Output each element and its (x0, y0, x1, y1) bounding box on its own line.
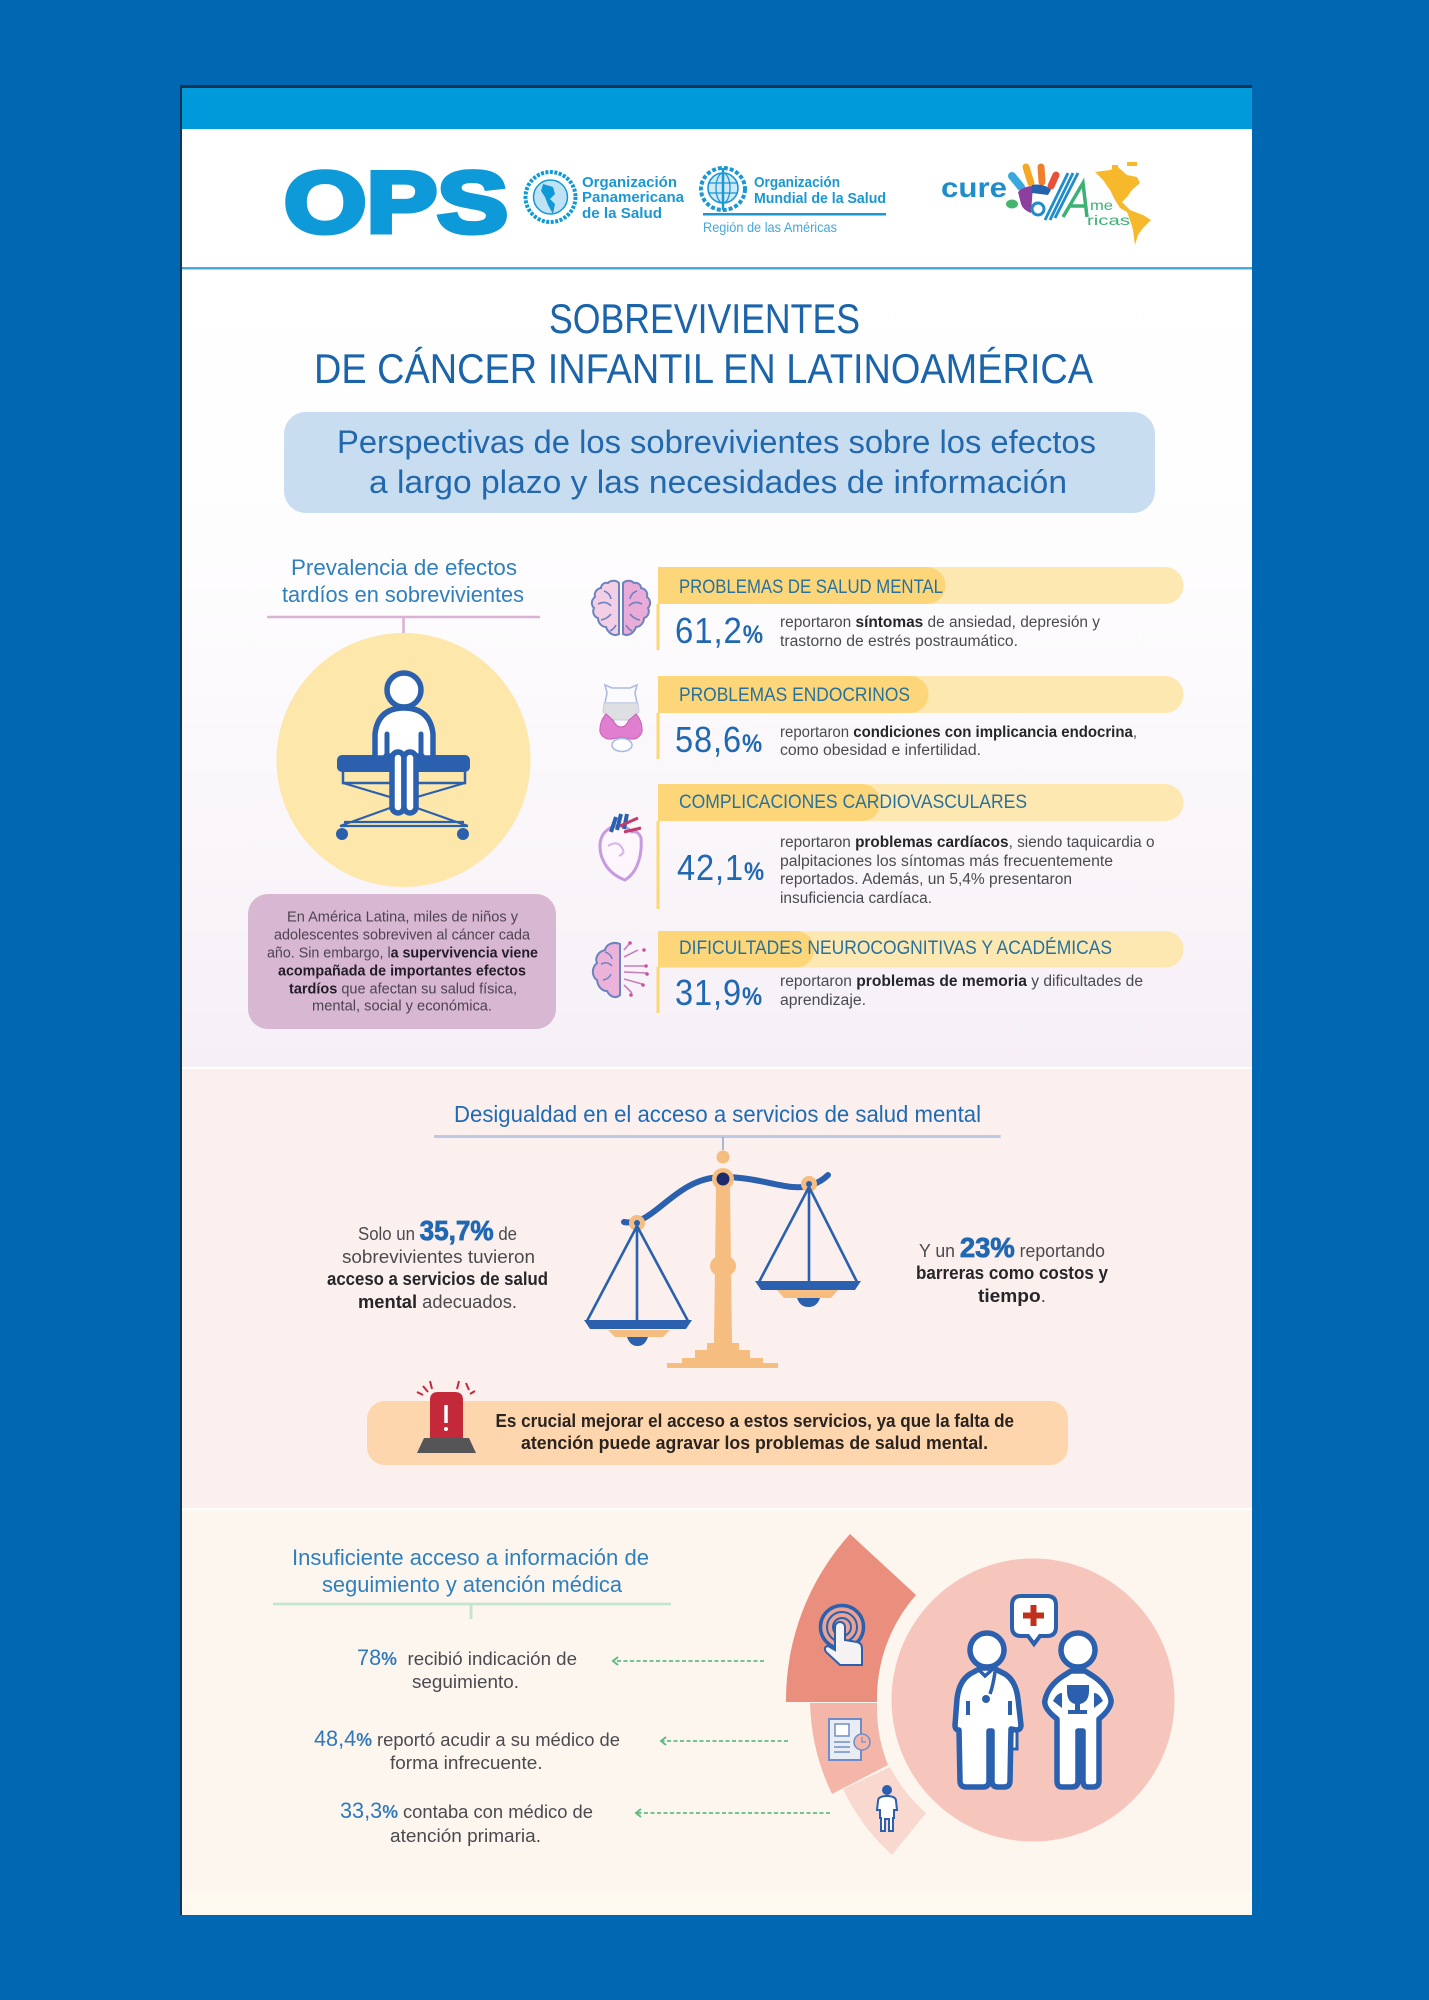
stat 48,4%: 48,4% (314, 1726, 372, 1751)
stat text: 35,7%: acceso a servicios de salud (327, 1269, 548, 1289)
callout: context text: acompañada de importantes efectos (278, 964, 526, 980)
logo: WHO emblem and name: Organización (754, 174, 840, 191)
description (780, 834, 1154, 907)
icon: alarm siren (417, 1381, 476, 1453)
stat text: 23% (916, 1232, 1108, 1306)
row: cardiovascular (600, 784, 1184, 909)
category bar: DIFICULTADES NEUROCOGNITIVAS Y ACADÉMICAS (679, 938, 1112, 959)
icon: document with clock (829, 1719, 870, 1760)
heading: prevalence (267, 555, 540, 634)
panel: insufficient follow-up information (273, 1534, 1174, 1855)
icon: unbalanced scale (584, 1150, 861, 1368)
panel: inequality in mental health access (327, 1101, 1108, 1465)
description: como obesidad e infertilidad. (780, 742, 981, 759)
radial chart: follow-up sectors (786, 1534, 926, 1855)
heading: follow-up: Insuficiente acceso a información de (292, 1545, 649, 1570)
subtitle banner: Perspectivas de los sobrevivientes sobre los efectos (337, 424, 1096, 460)
row: neurocognitive (593, 931, 1184, 1013)
stat text: 35,7%: sobrevivientes tuvieron (342, 1247, 535, 1267)
stat 58,6%: 58,6% (675, 719, 763, 760)
callout: context text (248, 894, 556, 1029)
icon: map of the Americas (1095, 162, 1151, 245)
stat 48,4% (314, 1726, 620, 1773)
row: endocrine (600, 676, 1184, 760)
subtitle banner: a largo plazo y las necesidades de información (369, 464, 1067, 500)
icon: speech bubble with cross (1012, 1596, 1056, 1644)
callout: improve access (367, 1401, 1068, 1465)
logo: OPS: OPS (284, 155, 508, 251)
category bar (656, 931, 1184, 1013)
callout: improve access: Es crucial mejorar el acceso a estos servicios, ya que la falta de (496, 1411, 1014, 1431)
icon: patient (1045, 1633, 1111, 1787)
description (780, 614, 1100, 650)
category bar: PROBLEMAS DE SALUD MENTAL (679, 577, 943, 598)
icon: child on examination table (276, 633, 530, 887)
description: reportaron problemas cardíacos, siendo taquicardia o (780, 834, 1154, 851)
stat 78% (357, 1645, 577, 1692)
title (314, 295, 1093, 392)
subtitle banner (284, 412, 1155, 513)
description: reportaron síntomas de ansiedad, depresión y (780, 614, 1100, 631)
icon: thyroid (600, 685, 642, 752)
icon: doctor (955, 1633, 1021, 1787)
description: palpitaciones los síntomas más frecuentemente (780, 853, 1113, 870)
row: mental health (592, 567, 1184, 651)
poster sheet (180, 85, 1252, 1915)
logo: PAHO emblem and name: Panamericana (582, 189, 685, 206)
stat 33,3%: 33,3% (340, 1798, 398, 1823)
category bar: PROBLEMAS ENDOCRINOS (679, 685, 910, 706)
description: trastorno de estrés postraumático. (780, 633, 1018, 650)
category bar (656, 784, 1184, 909)
logo: Cure All Américas (941, 162, 1151, 245)
description (780, 973, 1143, 1009)
icon: brain with neural connections (593, 941, 649, 997)
stat 78%: seguimiento. (412, 1672, 519, 1692)
description: reportados. Además, un 5,4% presentaron (780, 871, 1072, 888)
logo: Cure All Américas: ricas (1087, 212, 1130, 228)
arrow 1 (613, 1657, 764, 1665)
callout: context text: tardíos que afectan su salud física, (289, 981, 517, 997)
panel: prevalence of late effects (248, 555, 556, 1029)
logo: WHO emblem and name (701, 168, 886, 235)
heading: prevalence: tardíos en sobrevivientes (282, 582, 524, 607)
stat 61,2%: 61,2% (675, 610, 764, 651)
description: aprendizaje. (780, 992, 866, 1009)
heading: inequality: Desigualdad en el acceso a servicios de salud mental (454, 1101, 981, 1127)
arrow 3 (636, 1809, 830, 1817)
description: insuficiencia cardíaca. (780, 890, 932, 907)
category bar (656, 676, 1184, 759)
logo: Cure All Américas: cure (941, 172, 1007, 203)
stat 78%: recibió indicación de (408, 1649, 577, 1669)
big circle: doctor and patient (892, 1558, 1174, 1842)
heading: prevalence: Prevalencia de efectos (291, 555, 517, 580)
icon: heart (600, 814, 641, 880)
logo: PAHO emblem and name: de la Salud (582, 205, 662, 222)
stat text: 35,7% (327, 1215, 548, 1312)
title: SOBREVIVIENTES (549, 295, 860, 342)
stat 48,4%: reportó acudir a su médico de (377, 1730, 620, 1750)
description: reportaron condiciones con implicancia endocrina, (780, 724, 1137, 741)
stat text: 23%: tiempo. (978, 1286, 1046, 1306)
arrow 2 (661, 1737, 788, 1745)
callout: context text: En América Latina, miles de niños y (287, 910, 519, 926)
icon: brain (592, 581, 650, 635)
logo: Cure All Américas: me (1090, 197, 1113, 213)
heading: follow-up (273, 1545, 671, 1619)
category bar (656, 567, 1184, 650)
stat 33,3% (340, 1798, 593, 1846)
stat 33,3%: atención primaria. (390, 1826, 541, 1846)
logo: WHO emblem and name: Mundial de la Salud (754, 190, 886, 207)
heading: follow-up: seguimiento y atención médica (322, 1572, 623, 1597)
stat 42,1%: 42,1% (677, 847, 765, 888)
logo: PAHO emblem and name: Organización (582, 174, 677, 191)
callout: context text: mental, social y económica. (312, 999, 492, 1015)
icon: small doctor (877, 1785, 897, 1831)
callout: context text: año. Sin embargo, la supervivencia viene (267, 945, 538, 961)
category bar: COMPLICACIONES CARDIOVASCULARES (679, 792, 1027, 813)
stat text: 23%: barreras como costos y (916, 1263, 1108, 1283)
logo: WHO emblem and name: Región de las Américas (703, 220, 837, 235)
stat text: 35,7%: mental adecuados. (358, 1292, 517, 1312)
stat text: 23%: Y un 23% reportando (919, 1232, 1105, 1263)
title: DE CÁNCER INFANTIL EN LATINOAMÉRICA (314, 345, 1093, 392)
stat 33,3%: contaba con médico de (403, 1802, 593, 1822)
icon: touch (820, 1606, 864, 1665)
callout: context text: adolescentes sobreviven al cáncer cada (274, 927, 531, 943)
stat 31,9%: 31,9% (675, 972, 763, 1013)
stat 78%: 78% (357, 1645, 397, 1670)
description: reportaron problemas de memoria y dificultades de (780, 973, 1143, 990)
stat text: 35,7%: Solo un 35,7% de (358, 1215, 517, 1246)
stat 48,4%: forma infrecuente. (390, 1753, 542, 1773)
logo: PAHO emblem and name (526, 172, 685, 222)
description (780, 724, 1137, 759)
callout: improve access: atención puede agravar los problemas de salud mental. (521, 1433, 988, 1453)
